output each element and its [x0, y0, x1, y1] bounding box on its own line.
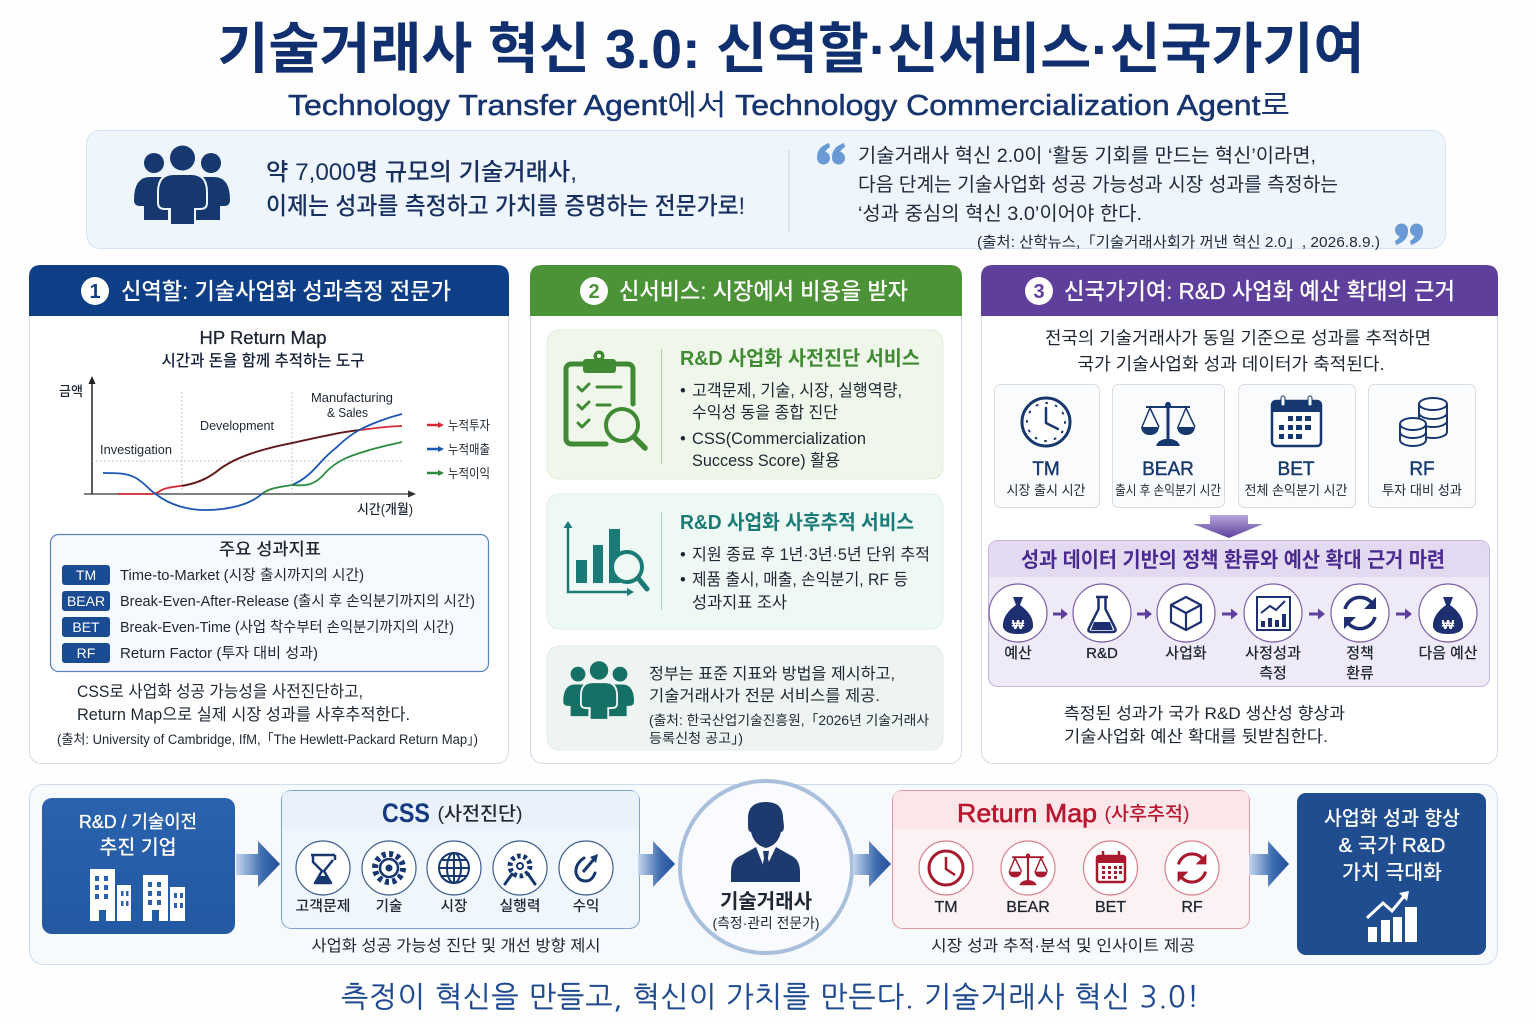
KPI box: 주요 성과지표 [219, 540, 321, 559]
panel 3 intro [1045, 328, 1431, 374]
panel 3 header [981, 265, 1498, 316]
card: pre-diagnosis service: 수익성 동을 종합 진단 [692, 403, 838, 422]
panel 3 conclusion: 측정된 성과가 국가 R&D 생산성 향상과 [1064, 704, 1345, 723]
KPI box: Return Factor (투자 대비 성과) [120, 645, 318, 662]
arrow: to agent [638, 841, 675, 887]
chart heading: 시간과 돈을 함께 추적하는 도구 [162, 352, 364, 370]
box: CSS: (사전진단) [438, 803, 522, 825]
CSS item: market [427, 841, 481, 915]
KPI box: BEAR [67, 593, 105, 609]
card: TM: TM [1032, 459, 1060, 480]
CSS item: profit [559, 841, 613, 915]
box: outcome [1297, 793, 1486, 955]
icon: clock [1022, 398, 1070, 446]
step: performance measurement: 사정성과 [1245, 645, 1301, 662]
card: government role: 등록신청 공고」) [649, 731, 743, 746]
step: budget [989, 584, 1047, 662]
card: BET: BET [1278, 459, 1315, 480]
panel 1 summary: (출처: University of Cambridge, IfM,「The Hewlett-Packard Return Map」) [57, 732, 478, 747]
box: CSS: CSS [382, 798, 430, 828]
icon: growth chart [1367, 891, 1417, 942]
icon: buildings [90, 869, 185, 921]
panel 1 summary [57, 682, 478, 747]
banner quote: 다음 단계는 기술사업화 성공 가능성과 시장 성과를 측정하는 [858, 174, 1338, 196]
icon: people group [134, 146, 230, 225]
CSS item: customer problem [296, 841, 350, 915]
card: follow-up service: 제품 출시, 매출, 손익분기, RF 등 [692, 570, 908, 589]
return map item: RF [1165, 841, 1219, 916]
return map item: BEAR [1001, 841, 1055, 916]
chart heading: HP Return Map [200, 328, 326, 348]
KPI box [50, 534, 488, 672]
line chart: return map: Manufacturing [311, 391, 393, 405]
icon: clipboard with magnifier [566, 350, 645, 448]
icon: scale [1141, 402, 1195, 446]
panel: bottom flow [30, 781, 1498, 964]
banner quote: (출처: 산학뉴스,「기술거래사회가 꺼낸 혁신 2.0」, 2026.8.9.) [977, 234, 1380, 251]
subtitle: Technology Transfer Agent 에서 Technology Commercialization Agent 로 [288, 90, 1290, 122]
step: R&D: R&D [1086, 645, 1118, 662]
card: pre-diagnosis service [547, 330, 943, 479]
central agent circle [680, 781, 852, 953]
banner headline: 이제는 성과를 측정하고 가치를 증명하는 전문가로! [266, 193, 745, 220]
return map caption: 시장 성과 추적·분석 및 인사이트 제공 [931, 937, 1195, 955]
step: R&D [1073, 584, 1131, 662]
arrow: to CSS [236, 841, 280, 887]
KPI box: RF [77, 645, 95, 661]
step: next budget [1418, 584, 1478, 662]
KPI box: Break-Even-Time (사업 착수부터 손익분기까지의 시간) [120, 619, 454, 636]
CSS item: market: 시장 [441, 898, 467, 915]
CSS item: execution [493, 841, 547, 915]
card: RF [1368, 384, 1476, 508]
panel 1 header [29, 265, 509, 316]
banner quote: ‘성과 중심의 혁신 3.0’이어야 한다. [858, 203, 1142, 225]
KPI box: Break-Even-After-Release (출시 후 손익분기까지의 시간) [120, 593, 475, 610]
panel 3 conclusion [1064, 704, 1345, 746]
panel 3 intro: 국가 기술사업화 성과 데이터가 축적된다. [1078, 354, 1384, 374]
box: Return Map: (사후추적) [1104, 803, 1190, 825]
card: BEAR: 출시 후 손익분기 시간 [1115, 483, 1221, 498]
card: government role: (출처: 한국산업기술진흥원,「2026년 기술거래사 [649, 713, 930, 728]
panel: national contribution [981, 265, 1498, 764]
chart legend: 누적투자 [448, 418, 490, 433]
return map item: TM [919, 841, 973, 916]
card: follow-up service: 성과지표 조사 [692, 593, 787, 612]
card: government role: 정부는 표준 지표와 방법을 제시하고, [649, 665, 895, 683]
closing slogan: 측정이 혁신을 만들고, 혁신이 가치를 만든다. 기술거래사 혁신 3.0! [341, 982, 1199, 1012]
box: Return Map: Return Map [957, 798, 1097, 828]
central agent circle: (측정·관리 전문가) [712, 915, 820, 931]
box: R&D companies: 추진 기업 [100, 836, 176, 859]
step: budget: 예산 [1004, 645, 1032, 662]
card: follow-up service: • [680, 546, 686, 564]
step: policy feedback: 정책 [1346, 645, 1374, 662]
return map item: TM: TM [934, 899, 958, 916]
step: commercialization [1157, 584, 1215, 662]
box: outcome: 가치 극대화 [1342, 861, 1442, 884]
chart legend [427, 418, 490, 481]
panel: service [530, 265, 962, 764]
panel 3 conclusion: 기술사업화 예산 확대를 뒷받침한다. [1064, 727, 1328, 746]
step: performance measurement: 측정 [1259, 665, 1287, 682]
icon: teal people group [563, 661, 634, 720]
card: TM: 시장 출시 시간 [1006, 483, 1086, 498]
step: policy feedback: 환류 [1346, 665, 1374, 682]
line chart: return map: 시간(개월) [357, 501, 413, 517]
line chart: return map [59, 376, 490, 517]
CSS item: technology: 기술 [376, 898, 402, 915]
card: pre-diagnosis service: CSS(Commercialization [692, 430, 866, 448]
card: pre-diagnosis service: 고객문제, 기술, 시장, 실행역량, [692, 381, 902, 400]
card: follow-up service: • [680, 571, 686, 589]
banner quote: 기술거래사 혁신 2.0이 ‘활동 기회를 만드는 혁신’이라면, [858, 145, 1316, 167]
card: BET [1238, 384, 1356, 508]
arrow: down [1193, 515, 1263, 538]
card: follow-up service: R&D 사업화 사후추적 서비스 [680, 511, 914, 534]
banner quote [858, 145, 1380, 251]
KPI box: BET [72, 619, 100, 635]
icon: opening quote [817, 143, 845, 164]
KPI box: Time-to-Market (시장 출시까지의 시간) [120, 567, 364, 584]
card: TM [994, 384, 1100, 508]
policy feedback box [988, 540, 1490, 686]
central agent circle: 기술거래사 [720, 890, 812, 913]
card: RF: 투자 대비 성과 [1382, 483, 1462, 498]
panel 1 header: 1 [89, 281, 101, 303]
KPI box: TM [76, 567, 96, 583]
card: government role [547, 646, 943, 750]
return map item: BEAR: BEAR [1006, 899, 1050, 916]
card: follow-up service [547, 494, 943, 629]
arrow: to return map [853, 841, 891, 887]
panel 2 header: 신서비스: 시장에서 비용을 받자 [619, 278, 908, 304]
box: outcome: & 국가 R&D [1338, 834, 1446, 857]
card: pre-diagnosis service: Success Score) 활용 [692, 451, 840, 470]
card: pre-diagnosis service: R&D 사업화 사전진단 서비스 [680, 347, 920, 370]
CSS item: technology [362, 841, 416, 915]
step: next budget: 다음 예산 [1418, 645, 1478, 662]
step: commercialization: 사업화 [1165, 645, 1207, 662]
card: pre-diagnosis service: • [680, 382, 686, 400]
title: 기술거래사 혁신 3.0: 신역할·신서비스·신국가기여 [218, 18, 1364, 80]
panel 3 header: 신국가기여: R&D 사업화 예산 확대의 근거 [1064, 278, 1455, 304]
panel 1 summary: CSS로 사업화 성공 가능성을 사전진단하고, [77, 682, 363, 701]
chart legend: 누적이익 [448, 466, 490, 481]
CSS caption: 사업화 성공 가능성 진단 및 개선 방향 제시 [312, 937, 600, 955]
arrow: to outcome [1249, 841, 1289, 887]
return map item: RF: RF [1181, 899, 1203, 916]
icon: bar chart with magnifier [564, 521, 647, 596]
card: pre-diagnosis service: • [680, 430, 686, 448]
card: follow-up service: 지원 종료 후 1년·3년·5년 단위 추적 [692, 545, 930, 564]
panel 2 header [530, 265, 962, 316]
step: next budget: ₩ [1442, 617, 1455, 632]
line chart: return map: Investigation [100, 443, 172, 457]
return map item: BET [1084, 841, 1138, 916]
card: BEAR [1112, 384, 1224, 508]
chart heading [162, 328, 364, 370]
return map item: BET: BET [1095, 899, 1126, 916]
cycle connector arrows [1053, 608, 1412, 620]
panel 2 header: 2 [588, 281, 600, 303]
step: policy feedback [1331, 584, 1389, 682]
box: Return Map [892, 790, 1250, 928]
step: performance measurement [1244, 584, 1302, 682]
CSS item: profit: 수익 [573, 898, 599, 915]
line chart: return map: & Sales [327, 406, 368, 420]
card: RF: RF [1409, 459, 1435, 480]
box: CSS [282, 790, 640, 928]
line chart: return map: Development [200, 419, 275, 433]
panel 1 summary: Return Map으로 실제 시장 성과를 사후추적한다. [77, 705, 410, 724]
box: R&D companies: R&D / 기술이전 [79, 812, 197, 832]
chart legend: 누적매출 [448, 442, 490, 457]
banner headline [266, 159, 745, 220]
icon: calendar [1272, 396, 1321, 446]
policy feedback box: 성과 데이터 기반의 정책 환류와 예산 확대 근거 마련 [1021, 549, 1445, 572]
card: government role: 기술거래사가 전문 서비스를 제공. [649, 687, 880, 705]
banner headline: 약 7,000명 규모의 기술거래사, [266, 159, 577, 186]
CSS item: execution: 실행력 [500, 898, 540, 915]
panel 3 header: 3 [1033, 281, 1045, 303]
panel 1 header: 신역할: 기술사업화 성과측정 전문가 [121, 278, 451, 304]
panel 3 intro: 전국의 기술거래사가 동일 기준으로 성과를 추적하면 [1045, 328, 1431, 348]
box: R&D companies [42, 798, 235, 934]
panel: role [29, 265, 509, 764]
step: budget: ₩ [1012, 617, 1025, 632]
card: BEAR: BEAR [1142, 459, 1194, 480]
icon: businessperson [731, 802, 800, 882]
card: BET: 전체 손익분기 시간 [1244, 483, 1348, 498]
CSS item: customer problem: 고객문제 [296, 898, 350, 915]
panel: top banner [86, 130, 1446, 251]
box: outcome: 사업화 성과 향상 [1324, 807, 1460, 830]
line chart: return map: 금액 [59, 384, 83, 399]
icon: closing quote [1395, 224, 1423, 245]
icon: coins [1400, 398, 1447, 446]
